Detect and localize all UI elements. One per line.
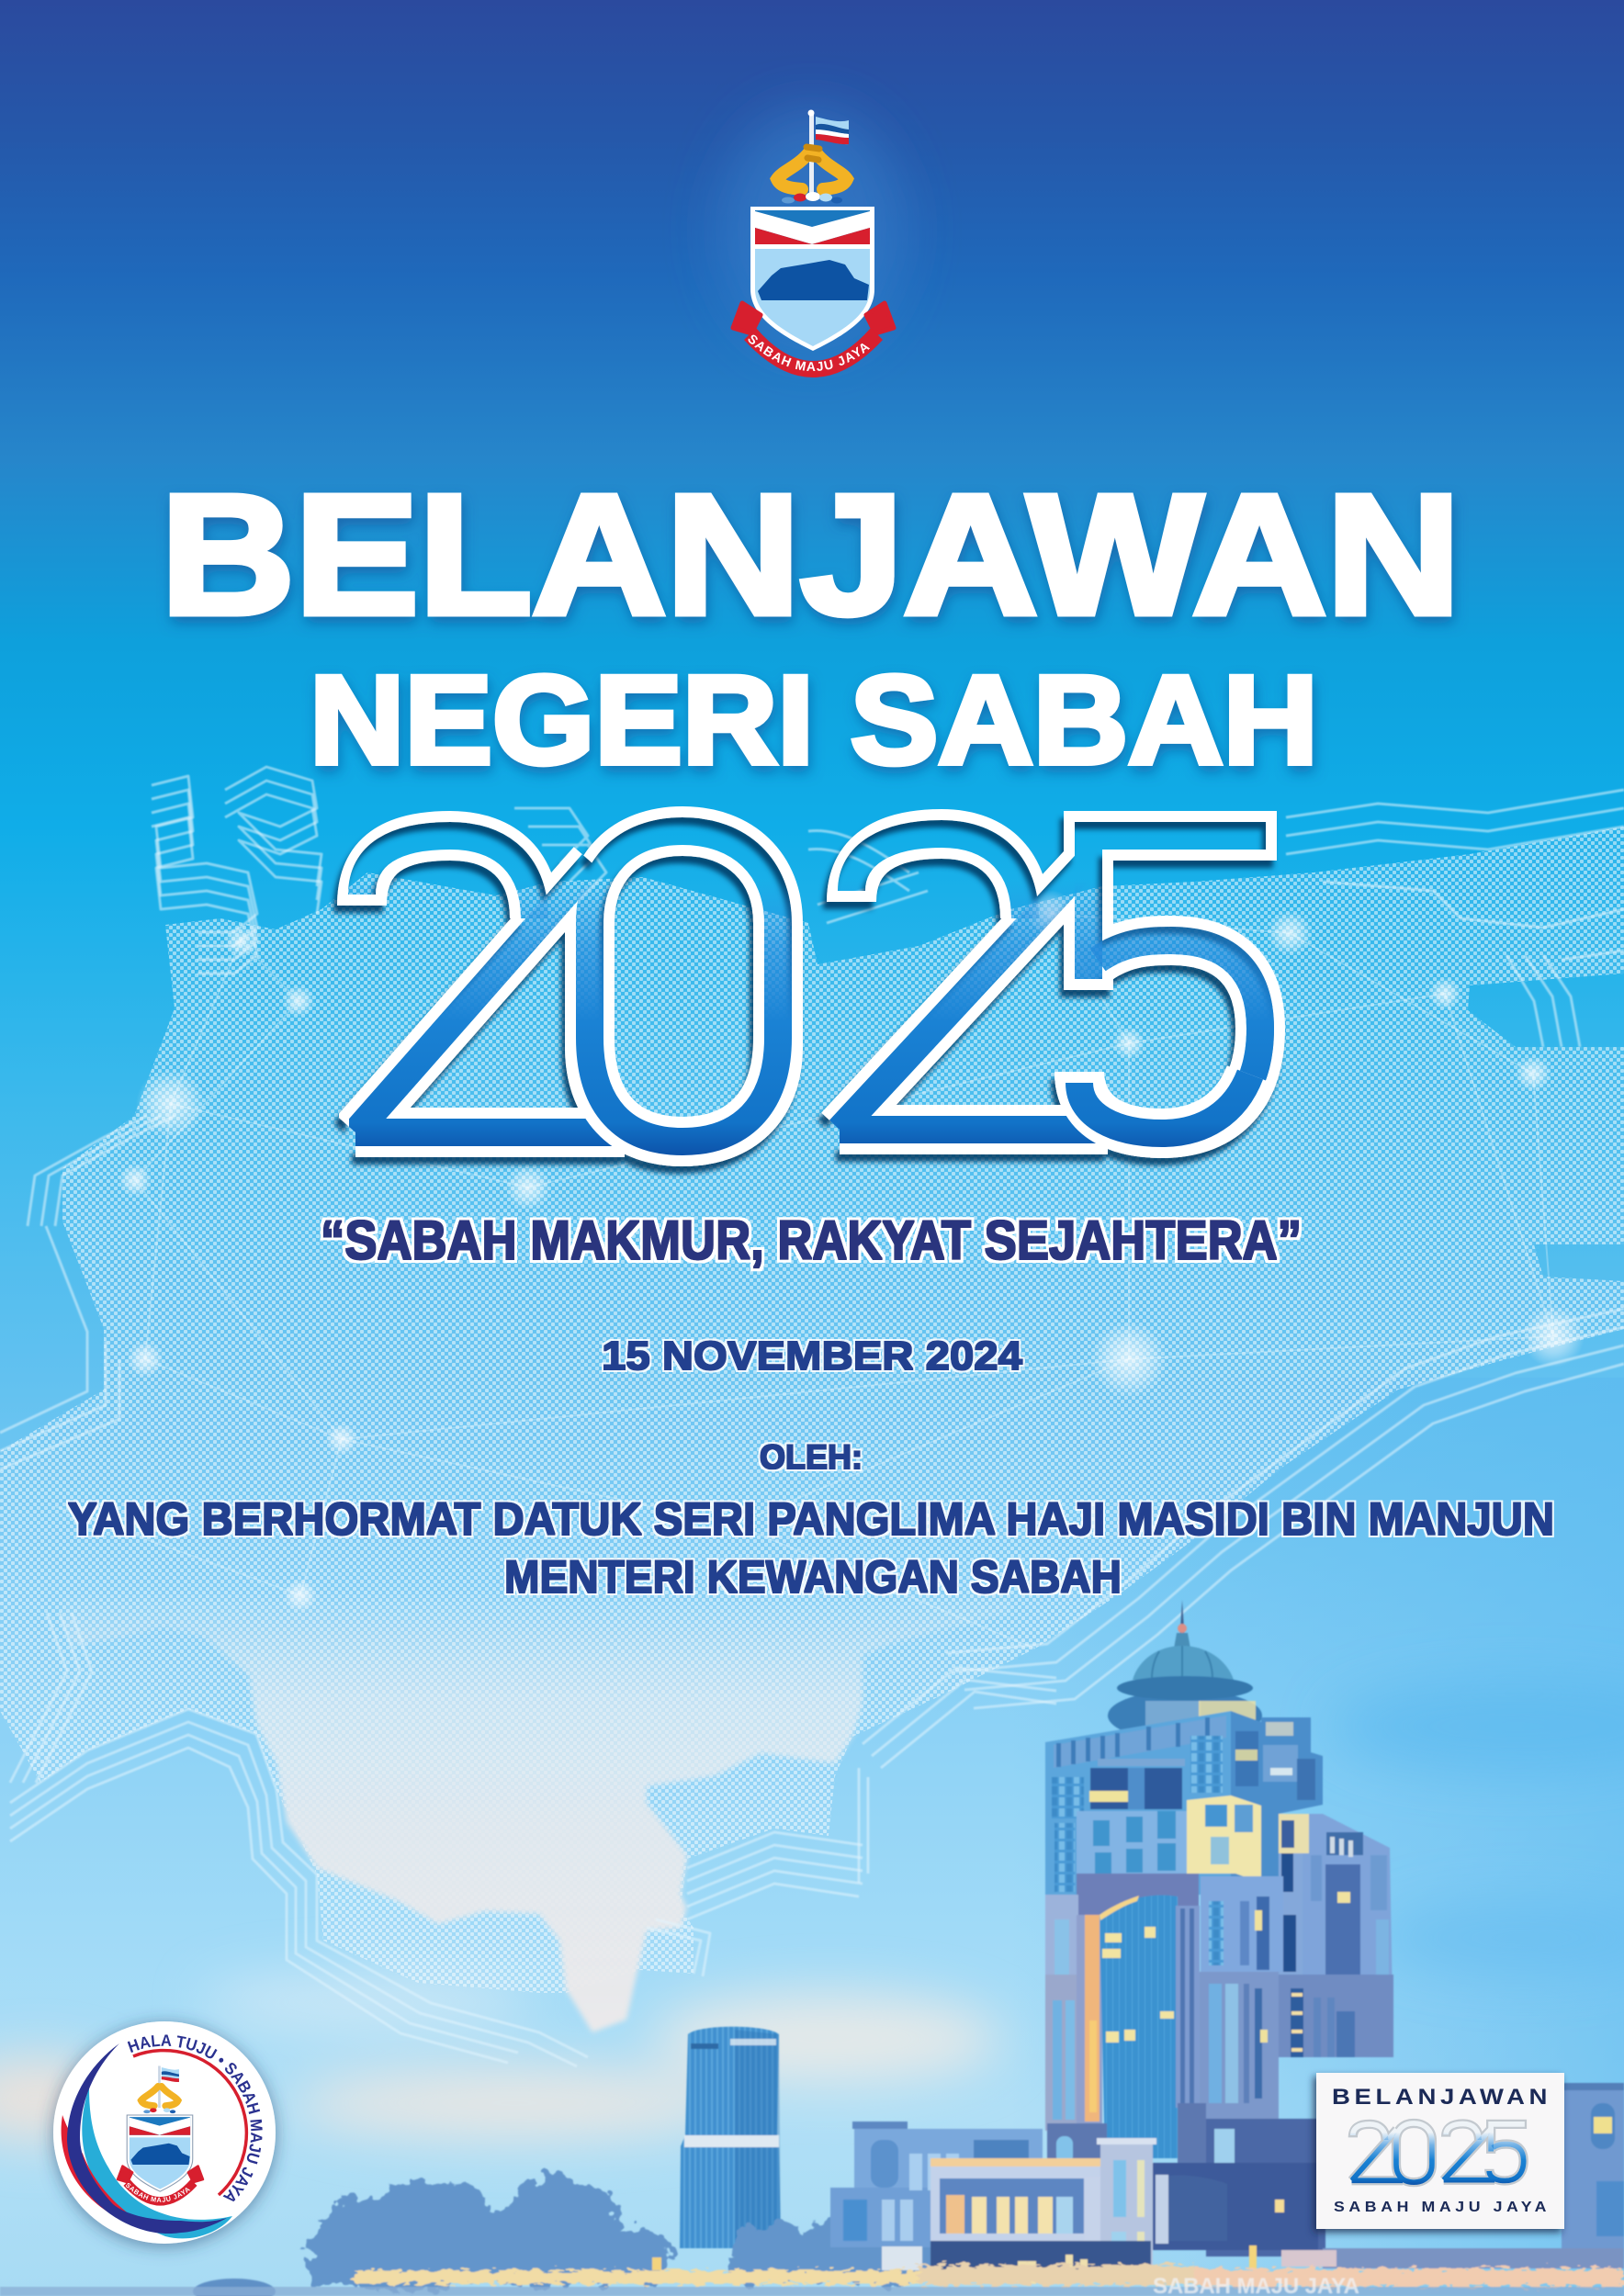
numerals white outline [329,806,1286,1177]
seal crest [116,2066,204,2206]
crest: arms holding the pole [777,147,847,189]
badge panel [1316,2073,1564,2229]
Tun Mustapha cylindrical tower [680,2027,781,2248]
badge top word: BELANJAWAN [1332,2085,1551,2110]
tree line [308,2175,946,2291]
slogan: “SABAH MAKMUR, RAKYAT SEJAHTERA” [321,1210,1302,1271]
speaker name: YANG BERHORMAT DATUK SERI PANGLIMA HAJI MASIDI BIN MANJUN [68,1493,1554,1545]
main tower right wing [1277,1814,1393,2057]
seal crest: SABAH MAJU JAYA [125,2183,191,2202]
speaker office: MENTERI KEWANGAN SABAH [504,1551,1122,1603]
front arc of zero [590,1038,778,1142]
badge mini 2025 [1352,2123,1527,2182]
date: 15 NOVEMBER 2024 [602,1334,1023,1379]
crest: motto ribbon: SABAH MAJU JAYA [748,334,870,371]
map of Sabah: halftone landmass [0,827,1624,1993]
crest: wreath gems [782,192,842,204]
main tower dome [1108,1600,1262,1745]
main tower upper block [1045,1711,1323,1895]
skyline: foreground city [0,1600,1624,2296]
seal red arc [133,2051,246,2195]
crest: shield [750,207,874,351]
small island silhouette [193,2279,276,2296]
main title: BELANJAWAN: BELANJAWAN [161,460,1460,650]
seal crescents [62,2043,232,2238]
network nodes [118,890,1585,1612]
podium dark base and arches [930,2119,1325,2284]
seal disc [53,2021,276,2244]
map contour lines [0,767,1624,2066]
front bowl of five [1079,1072,1250,1133]
crest: flag and pole [808,110,849,193]
main tower middle section [1045,1874,1283,2167]
year 2025 large outlined numerals [329,806,1286,1177]
right side deeper sky tint [1010,1378,1624,2296]
left low building [830,2122,1043,2247]
waterfront lights strip [0,2245,1624,2296]
right side building [1562,2083,1624,2248]
subtitle: NEGERI SABAH: NEGERI SABAH [310,650,1318,791]
badge: Belanjawan 2025 Sabah Maju Jaya [1316,2073,1564,2229]
round seal: Hala Tuju [42,2013,287,2257]
network lines across the map [55,914,1553,1649]
oleh label: OLEH: [760,1438,863,1476]
pale haze over southern land [61,1589,1010,2032]
badge bottom words: SABAH MAJU JAYA [1334,2200,1551,2215]
seal circular text: HALA TUJU • SABAH MAJU JAYA [127,2035,263,2202]
crest: motto ribbon [731,301,897,377]
numerals blue gradient channel [355,831,1266,1142]
state crest at top [731,110,897,377]
